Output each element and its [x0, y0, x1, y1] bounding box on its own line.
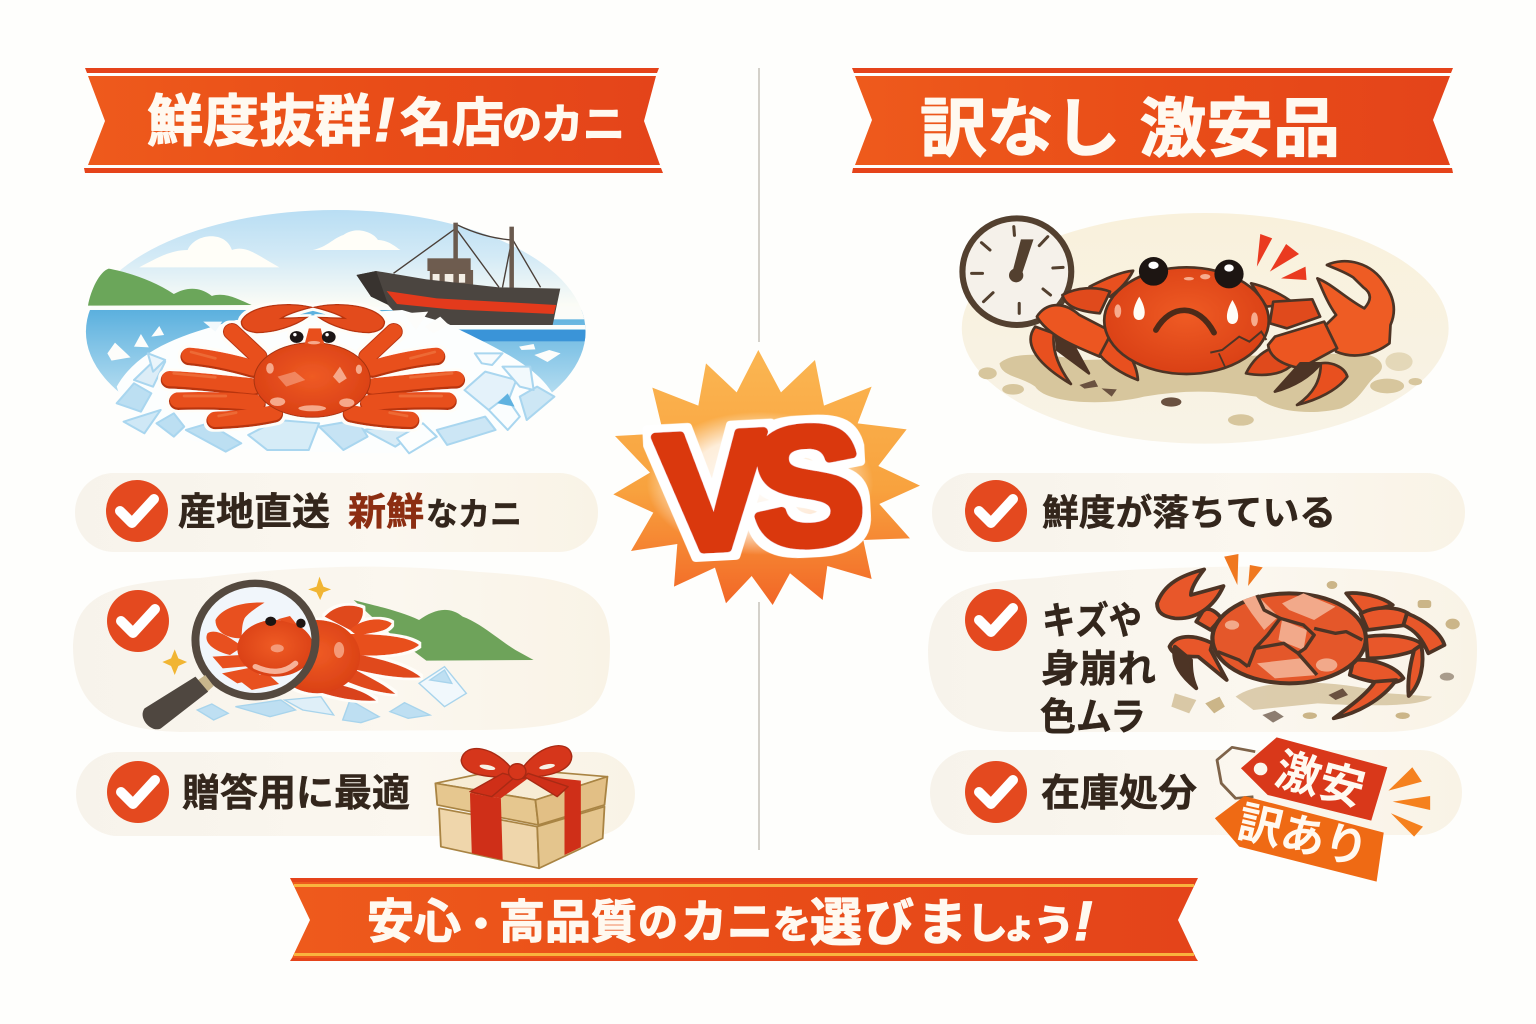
- banner: left title: [84, 68, 663, 173]
- icon: gift box: [435, 746, 607, 868]
- center divider line: [758, 68, 760, 850]
- text: item 2: キズや: [1042, 600, 1142, 643]
- left dark legs: [1056, 333, 1089, 373]
- icon: check: [107, 590, 169, 652]
- icon: price tags: [1215, 737, 1430, 882]
- fishing boat: [356, 223, 560, 325]
- text: bottom message: ょ: [1002, 908, 1036, 946]
- clock: [962, 218, 1071, 325]
- panel: right item 1: [932, 473, 1465, 552]
- text: bottom message: し: [966, 900, 1008, 947]
- panel: left item 1: [75, 473, 598, 552]
- magnifier: [195, 583, 315, 697]
- text: item 3: 在庫処分: [1041, 773, 1197, 815]
- panel: right item 2: [928, 554, 1477, 739]
- starburst: [613, 350, 920, 605]
- illustration: damaged crab: [1157, 554, 1460, 723]
- text: bottom message: ・: [461, 903, 501, 947]
- text: bottom message: カニ: [681, 896, 773, 948]
- ice: [117, 310, 554, 453]
- heading: right title text: 訳なし 激安品: [920, 93, 1340, 165]
- icon: check: [965, 761, 1027, 823]
- text: bottom message: う: [1033, 902, 1075, 949]
- hill: [354, 600, 534, 661]
- banner: right title: [852, 68, 1453, 173]
- icon: check: [965, 589, 1027, 651]
- icon: check: [965, 480, 1027, 542]
- alert marks: [1257, 234, 1307, 280]
- sand patches: [978, 352, 1422, 426]
- body: [254, 343, 370, 417]
- shell: [1212, 593, 1366, 683]
- heading: left title text: !: [374, 86, 395, 155]
- right limbs: [1270, 299, 1320, 328]
- illustration: stale sad crab with clock: [962, 213, 1449, 444]
- heading: left title text: 名店: [400, 95, 504, 153]
- text: item 3: 贈答用に最適: [182, 773, 410, 815]
- heading: left title text: 鮮度抜群: [147, 90, 371, 153]
- hills: [88, 269, 252, 306]
- text: item 2: 身崩れ: [1041, 649, 1156, 691]
- text: bottom message: を: [773, 905, 811, 947]
- text: bottom message: ま: [917, 895, 967, 951]
- text: bottom message: び: [864, 895, 914, 951]
- panel: left item 3: [76, 746, 635, 868]
- right limbs: [314, 305, 456, 421]
- icon: check: [106, 480, 168, 542]
- crab: fresh: [170, 305, 456, 421]
- text: bottom message: 高品質: [499, 896, 637, 948]
- text: item 1: 鮮度が落ちている: [1042, 492, 1336, 533]
- claw: [1196, 609, 1221, 630]
- heading: left title text: カニ: [541, 101, 625, 148]
- heading: left title text: の: [502, 103, 542, 147]
- text: bottom message: 選: [810, 895, 862, 953]
- sparkles: [162, 577, 331, 675]
- illustration: fresh crab on ice with ship: [70, 203, 610, 453]
- text: item 2: 色ムラ: [1040, 697, 1146, 739]
- panel: left item 2: [73, 567, 610, 732]
- illustration: magnifier over crab: [143, 577, 534, 729]
- text: bottom message: !: [1074, 889, 1093, 952]
- panel: right item 3: [930, 737, 1462, 882]
- orange alert marks: [1224, 554, 1263, 586]
- text: tag wakeari: 訳あり: [1233, 798, 1373, 875]
- ice: [197, 667, 466, 723]
- clouds: [107, 230, 561, 362]
- VS text: VS: [652, 392, 862, 587]
- debris: [1171, 581, 1460, 723]
- VS starburst badge: [613, 350, 920, 605]
- text: bottom message: の: [638, 901, 678, 945]
- crab outside lens: [274, 606, 421, 701]
- face: [1114, 257, 1266, 367]
- banner: bottom message: [290, 878, 1198, 961]
- body: [1104, 267, 1269, 374]
- left limbs: [170, 305, 312, 421]
- icon: check: [107, 761, 169, 823]
- crab: sad: [1031, 261, 1394, 405]
- text: item 2: [1040, 600, 1156, 739]
- right legs: [1346, 593, 1393, 613]
- text: item 1: 産地直送: [178, 492, 330, 534]
- text: item 1: 新鮮: [348, 492, 424, 534]
- text: item 1: なカニ: [426, 496, 522, 532]
- text: bottom message: 安心: [367, 895, 461, 948]
- lens content: [200, 587, 312, 693]
- text: tag gekiyasu: 激安: [1270, 743, 1370, 816]
